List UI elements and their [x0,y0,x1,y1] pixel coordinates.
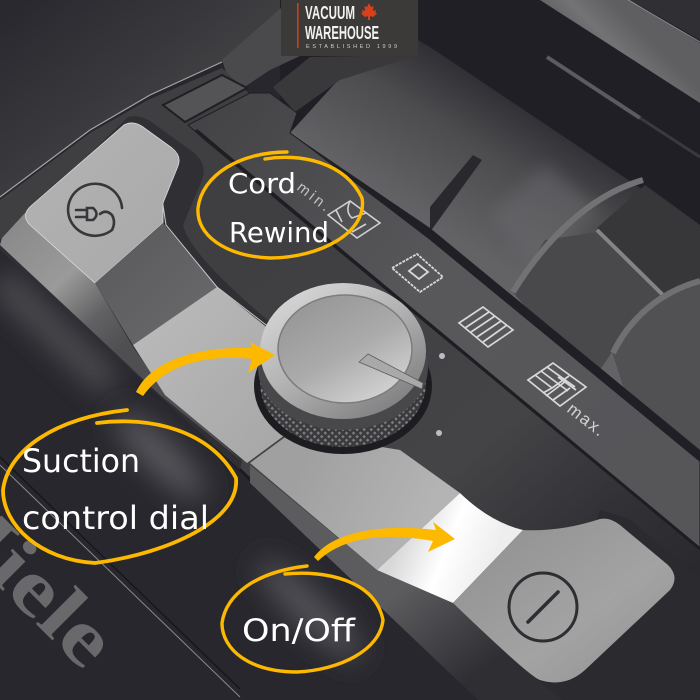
lower edge lines [0,247,480,700]
position dots [436,353,445,436]
body highlights [0,280,371,670]
logo WAREHOUSE: WAREHOUSE [305,23,379,43]
switch edge highlight [163,205,270,328]
circle [198,152,363,258]
container ring [513,180,643,292]
logo tagline: ESTABLISHED 1999 [306,44,397,50]
upper switch [0,123,285,465]
lower switch pad [453,519,675,682]
lower switch side [250,465,562,700]
top-left body [0,0,300,197]
logo VACUUM: VACUUM [305,3,355,23]
knurled base [260,319,426,447]
dial pocket [254,318,432,454]
light band [540,0,700,103]
logo red bar [297,3,299,48]
upper switch pocket [0,116,270,470]
canister wall [222,8,300,88]
icon: hard floor [328,201,380,238]
lower switch light ramp [377,493,523,603]
icon: power [509,573,577,641]
container upper dark bump [273,55,418,112]
icon strip [188,93,700,550]
icon: striped carpet [459,307,513,347]
max label: max. [564,399,608,440]
transparent dust container [290,40,700,457]
logo maple leaf [361,3,377,20]
inner disc [278,295,412,403]
switch top pad [25,123,179,283]
switch side facet [0,213,247,465]
callout: cord rewind [198,152,363,258]
arrow: to on/off switch [314,522,455,561]
arrow: to dial [136,342,275,396]
icon: parquet floor [528,363,586,406]
callout: cord rewind: Rewind [229,216,329,249]
left edge glow [0,280,110,385]
lower switch [250,432,700,700]
switch lower flat [133,287,285,463]
text: Cord [228,167,296,200]
text: Suction [22,442,140,480]
logo [281,0,418,56]
mesh section between rings [513,232,666,385]
suction dial [254,283,432,454]
lower body [0,250,478,700]
small top button [163,75,247,122]
strip lower dark line [196,130,700,549]
callout: suction control dial: control dial [22,499,209,537]
text: On/Off [242,613,356,649]
icon: cord rewind plug [68,184,122,236]
container rib [597,230,666,298]
right-hand canister [222,0,700,470]
outer ring [260,283,426,419]
callout: on/off [222,566,383,672]
pointer [359,354,423,389]
pad pocket [537,510,700,700]
lower chamber [612,284,700,450]
circle [222,566,383,672]
lower switch flat [250,432,460,570]
glass reflection [490,165,600,270]
light top edge [0,62,222,197]
lower ring [613,281,700,353]
icon: patterned rug [392,254,443,292]
min label: min. [294,179,333,215]
switch ramp [95,223,217,345]
callout: suction control dial [3,410,236,563]
strip upper dark stripe [290,133,700,462]
dark canister highlight stripe [547,57,640,118]
inner dark wedge [430,155,482,232]
circle [3,410,236,563]
dark mesh upper section [597,185,700,296]
lower-right panel shading [160,140,700,700]
